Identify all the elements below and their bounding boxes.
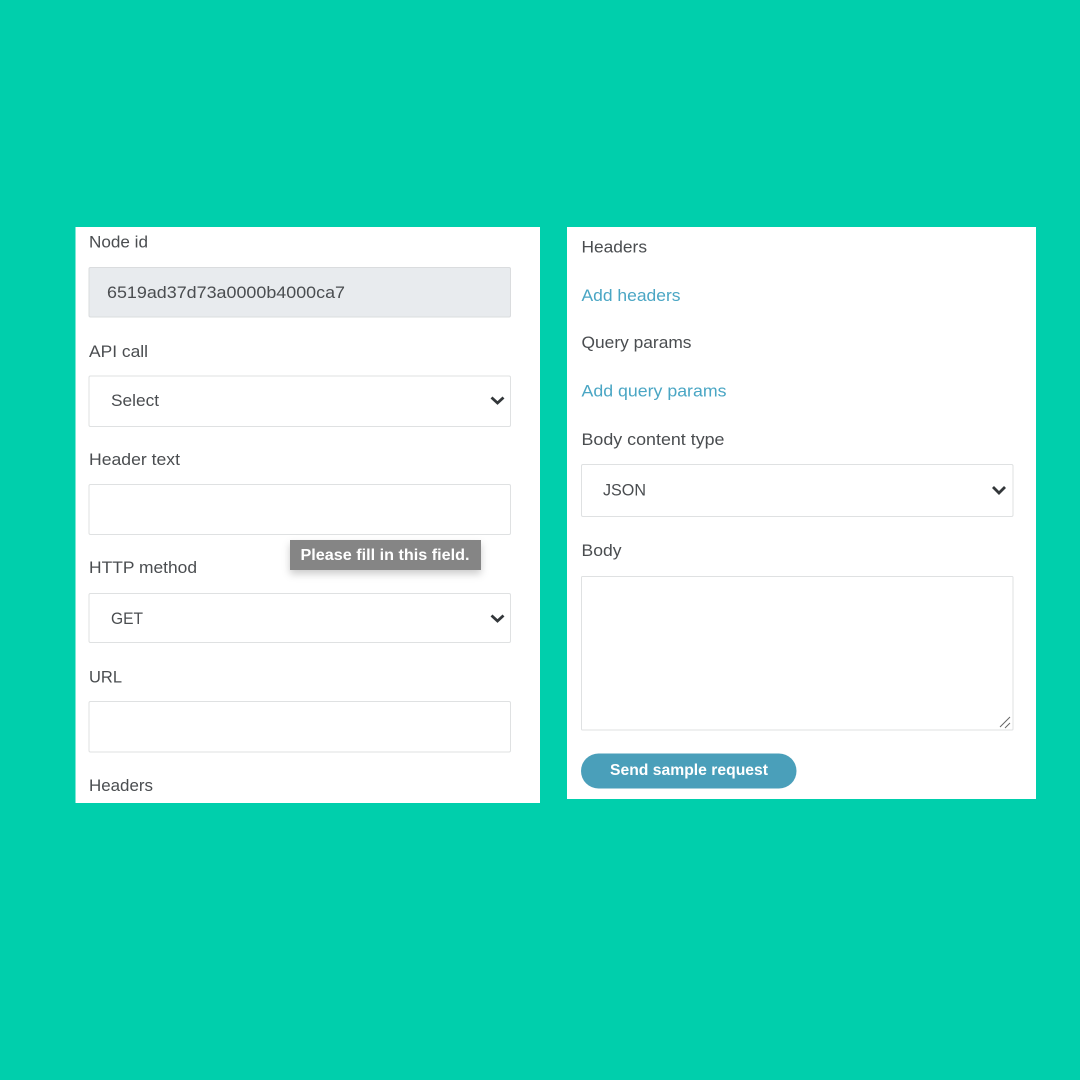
label: Node id: Node id xyxy=(89,234,148,252)
input: Header text xyxy=(89,484,510,534)
select: Body content type xyxy=(582,464,1013,516)
label: URL: URL xyxy=(89,668,122,686)
link: Add headers: Add headers xyxy=(582,287,680,305)
select: HTTP method xyxy=(89,594,510,642)
panel: left form xyxy=(76,227,540,803)
label: API call: API call xyxy=(89,343,148,361)
tooltip: validation message xyxy=(290,540,481,570)
button: Send sample request xyxy=(581,754,796,788)
select: API call: Select xyxy=(111,392,159,410)
textarea: Body xyxy=(582,576,1013,730)
input: URL xyxy=(89,702,510,752)
label: Body content type: Body content type xyxy=(582,431,724,449)
label: HTTP method: HTTP method xyxy=(89,559,197,577)
select: API call xyxy=(89,376,510,426)
button: Send sample request: Send sample request xyxy=(610,762,769,779)
tooltip: validation message: Please fill in this field. xyxy=(300,547,470,564)
select: Body content type: JSON xyxy=(603,482,646,500)
label: Headers: Headers xyxy=(89,777,153,795)
label: Headers: Headers xyxy=(582,238,647,256)
select: HTTP method: GET xyxy=(111,610,143,628)
field: Node id value: 6519ad37d73a0000b4000ca7 xyxy=(107,284,345,302)
label: Body: Body xyxy=(582,542,622,560)
panel: right form xyxy=(567,227,1036,799)
label: Header text: Header text xyxy=(89,451,180,469)
label: Query params: Query params xyxy=(582,334,692,352)
link: Add query params: Add query params xyxy=(582,382,726,400)
field: Node id value xyxy=(89,268,510,317)
